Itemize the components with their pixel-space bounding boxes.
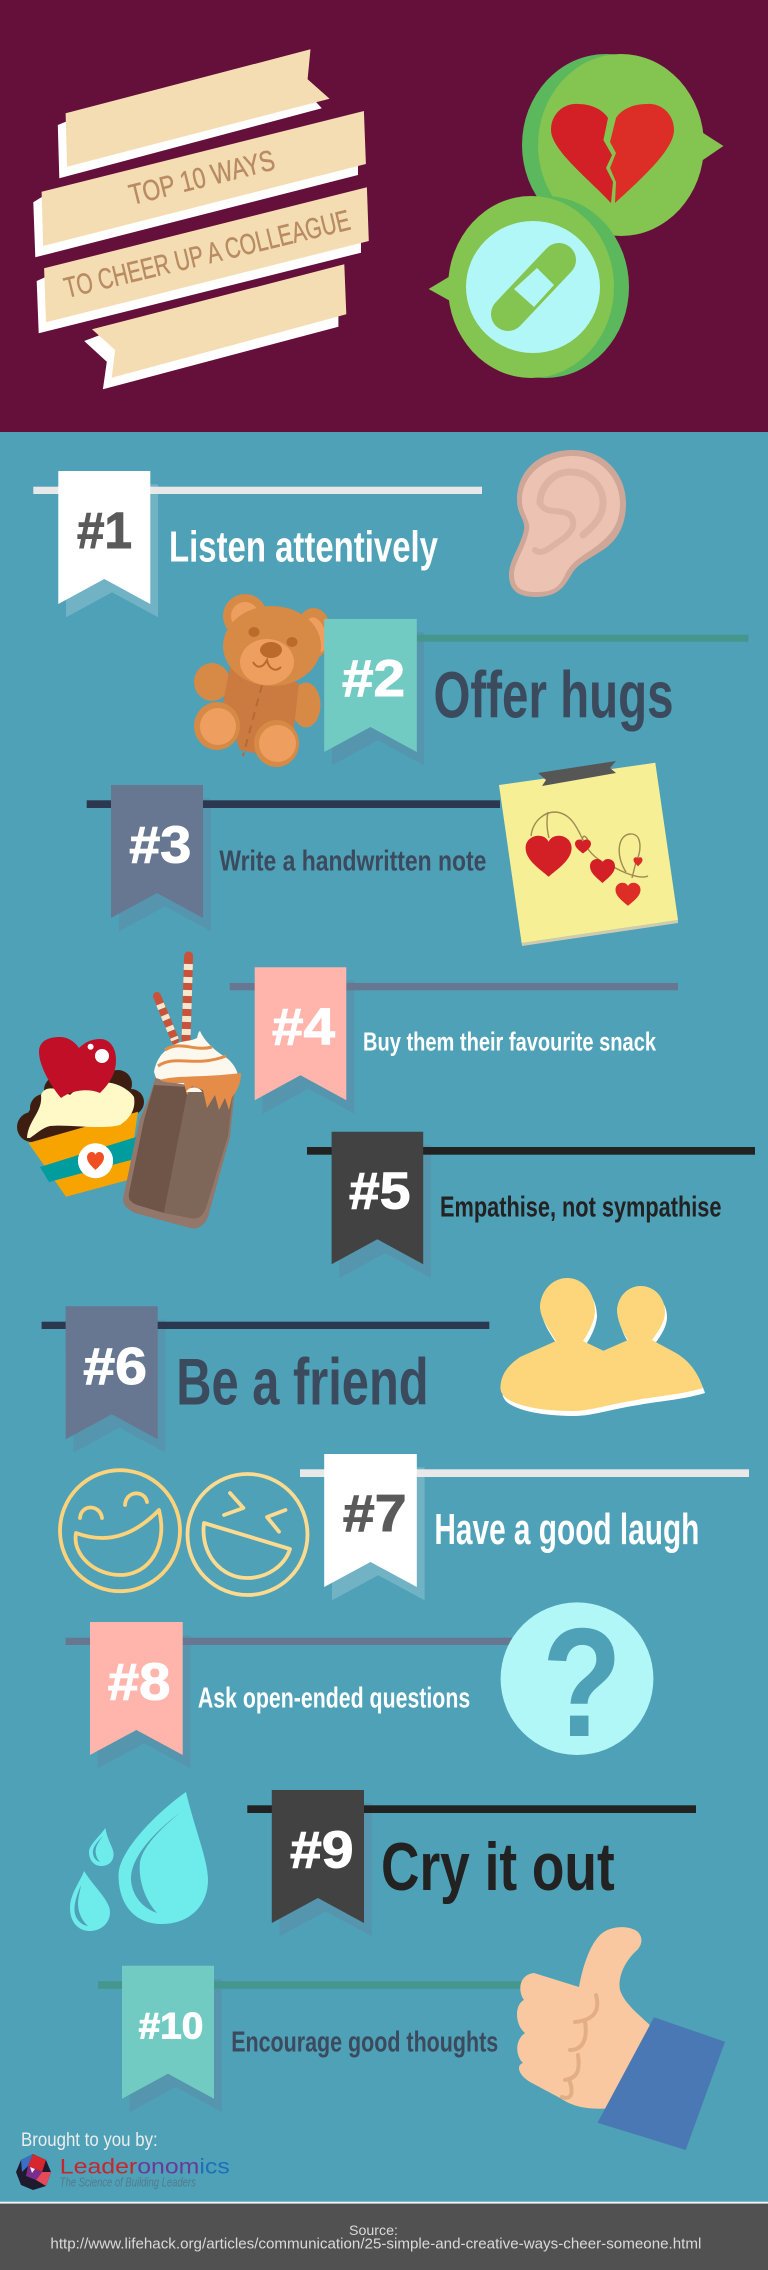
icon: tear drops [70,1792,208,1931]
item text: Listen attentively [169,523,438,572]
credit: brought to you by: Brought to you by: [21,2130,158,2151]
item text: Offer hugs [434,658,674,732]
item text: Buy them their favourite snack [363,1027,656,1057]
item 2: offer hugs [194,594,748,767]
credit: brought to you by [16,2130,230,2190]
icon: bandage speech bubble [429,196,629,378]
title text line 1: TOP 10 WAYS [126,145,278,212]
title ribbon banner [33,49,369,389]
item text: Encourage good thoughts [231,2027,498,2059]
icon: ear [509,450,626,597]
ribbon badge #8 [90,1622,183,1755]
ribbon badge #1 [58,471,150,604]
icon: milkshake with straws [123,956,241,1228]
item 7: good laugh [60,1454,749,1600]
logo: Leaderonomics gem [16,2154,51,2190]
item 5: empathise [307,1132,755,1278]
ribbon badge #5 [332,1132,423,1264]
ribbon badge #3 [111,785,203,918]
icon: laughing face 1 [60,1470,180,1591]
icon: two friends silhouette [500,1278,705,1416]
item 4: favourite snack [17,956,678,1228]
ribbon badge #7: #7 [343,1485,406,1543]
item 10: encourage good thoughts [98,1927,725,2150]
ribbon badge #7 [324,1454,417,1587]
source label: Source: [349,2222,398,2238]
logo wordmark: Leader onom ics [60,2155,230,2178]
ribbon badge #2: #2 [342,650,405,708]
panel: header [0,0,768,432]
ribbon badge #5: #5 [349,1163,410,1221]
ribbon badge #6: #6 [83,1338,147,1396]
item 9: cry it out [70,1790,696,1936]
icon: thumbs up [517,1927,725,2150]
title text line 2: TO CHEER UP A COLLEAGUE [61,205,353,305]
ribbon badge #2 [324,619,417,752]
ribbon badge #3: #3 [129,817,191,875]
item 6: be a friend [42,1278,705,1453]
ribbon badge #4 [255,967,346,1100]
icon: question mark circle: ? [542,1596,622,1769]
icon: laughing face 2 [188,1474,308,1595]
ribbon badge #1: #1 [77,502,132,559]
ribbon badge #4: #4 [272,998,335,1056]
ribbon badge #6 [66,1306,158,1439]
ribbon badge #10 [122,1966,214,2099]
ribbon badge #9 [272,1790,364,1923]
item text: Ask open-ended questions [198,1683,470,1715]
ribbon badge #9: #9 [290,1821,354,1879]
item text: Cry it out [381,1829,615,1905]
item 1: listen attentively [33,450,626,617]
icon: cupcake [17,1037,144,1197]
item text: Write a handwritten note [219,846,486,878]
icon: sticky note with hearts [499,761,678,946]
footer: source [0,2202,768,2270]
icon: teddy bear [194,594,332,767]
icon: question mark circle [501,1596,653,1769]
source url: http://www.lifehack.org/articles/communication/25-simple-and-creative-ways-cheer-someone.html [50,2236,701,2252]
ribbon badge #10: #10 [139,2005,203,2046]
item text: Be a friend [176,1344,429,1418]
logo tagline: The Science of Building Leaders [60,2174,196,2190]
item 8: open-ended questions [66,1596,653,1769]
icon: broken heart speech bubble [522,54,723,236]
item 3: handwritten note [87,761,678,946]
ribbon badge #8: #8 [108,1653,170,1711]
